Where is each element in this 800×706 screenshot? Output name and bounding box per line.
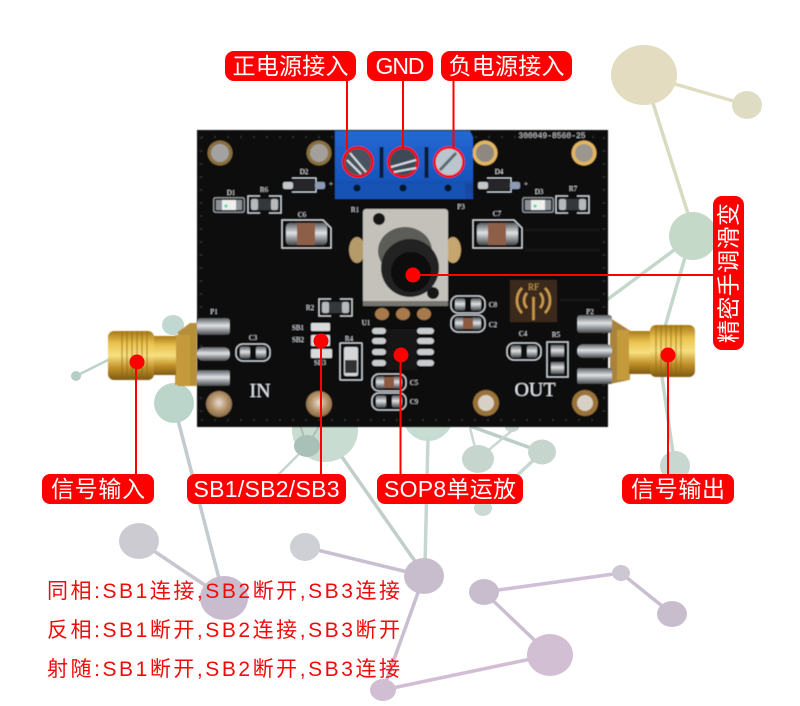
SMA connector: input bbox=[108, 318, 230, 386]
silkscreen labels: C7 bbox=[493, 210, 502, 218]
silkscreen labels: R2 bbox=[306, 304, 315, 312]
silkscreen labels: R5 bbox=[552, 331, 561, 339]
label: GND bbox=[367, 51, 433, 81]
silkscreen labels: R4 bbox=[345, 335, 354, 343]
silkscreen labels: C8 bbox=[489, 301, 498, 309]
R5 pads bbox=[547, 342, 568, 377]
label: GND: GND bbox=[376, 53, 424, 79]
PCB board bbox=[197, 130, 608, 427]
silkscreen labels: OUT bbox=[514, 379, 556, 401]
silkscreen labels: SB1 bbox=[292, 324, 305, 332]
silkscreen labels: P1 bbox=[210, 308, 218, 316]
silkscreen labels: P3 bbox=[457, 203, 465, 211]
text block: configuration modes bbox=[47, 580, 400, 681]
silkscreen labels: R1 bbox=[351, 206, 360, 214]
terminal block bbox=[335, 131, 473, 199]
mounting holes bbox=[206, 140, 598, 417]
silkscreen labels: C9 bbox=[410, 398, 419, 406]
screw 2 bbox=[388, 148, 418, 176]
board substrate bbox=[197, 130, 608, 427]
screw 3 bbox=[434, 148, 464, 176]
silkscreen labels bbox=[210, 168, 594, 406]
silkscreen labels: D2 bbox=[300, 168, 309, 176]
silkscreen labels: D4 bbox=[495, 168, 504, 176]
silkscreen labels: SB2 bbox=[292, 336, 305, 344]
precision potentiometer bbox=[349, 209, 461, 320]
serial number: 300049-8560-25 bbox=[518, 132, 586, 141]
silkscreen labels: SB3 bbox=[314, 359, 327, 367]
leader lines and dots bbox=[130, 81, 713, 474]
label: SOP8 op-amp: SOP8单运放 bbox=[384, 476, 516, 502]
screw 1 bbox=[344, 148, 372, 176]
icon: RF logo: RF bbox=[528, 282, 539, 292]
label: signal input: 信号输入 bbox=[51, 476, 145, 502]
silkscreen labels: U1 bbox=[362, 319, 371, 327]
silkscreen labels: C3 bbox=[249, 334, 258, 342]
purple nodes bbox=[119, 523, 687, 701]
silkscreen labels: + bbox=[329, 180, 333, 188]
mode: follower: 射随:SB1断开,SB2断开,SB3连接 bbox=[47, 658, 400, 681]
label: precision trimmer: 精密手调滑变 bbox=[716, 203, 742, 343]
SMA connector: output bbox=[577, 315, 695, 384]
surface components bbox=[214, 178, 589, 410]
icon: RF logo bbox=[510, 280, 557, 322]
green nodes bbox=[71, 212, 717, 516]
label: signal output: 信号输出 bbox=[631, 476, 725, 502]
mode: inverting: 反相:SB1断开,SB2连接,SB3断开 bbox=[47, 619, 400, 642]
silkscreen labels: C2 bbox=[489, 321, 498, 329]
label: positive supply input: 正电源接入 bbox=[232, 53, 348, 79]
silkscreen labels: P2 bbox=[586, 308, 594, 316]
label: negative supply input: 负电源接入 bbox=[448, 53, 564, 79]
silkscreen labels: D3 bbox=[535, 188, 544, 196]
silkscreen labels: IN bbox=[249, 380, 271, 402]
U1 SOP8 op-amp bbox=[372, 328, 434, 370]
SB solder bridges bbox=[311, 323, 332, 358]
tan nodes bbox=[611, 45, 762, 220]
silkscreen labels: R6 bbox=[260, 186, 269, 194]
silkscreen labels: R7 bbox=[569, 185, 578, 193]
mode: non-inverting: 同相:SB1连接,SB2断开,SB3连接 bbox=[47, 580, 400, 603]
silkscreen labels: C5 bbox=[410, 379, 419, 387]
silkscreen labels: C4 bbox=[519, 330, 528, 338]
green to purple links bbox=[178, 420, 428, 590]
R4 resistor bbox=[340, 343, 362, 380]
label: SB1/SB2/SB3: SB1/SB2/SB3 bbox=[194, 476, 340, 502]
silkscreen labels: C6 bbox=[298, 211, 307, 219]
silkscreen labels: D1 bbox=[227, 189, 236, 197]
silkscreen labels: + bbox=[524, 180, 528, 188]
